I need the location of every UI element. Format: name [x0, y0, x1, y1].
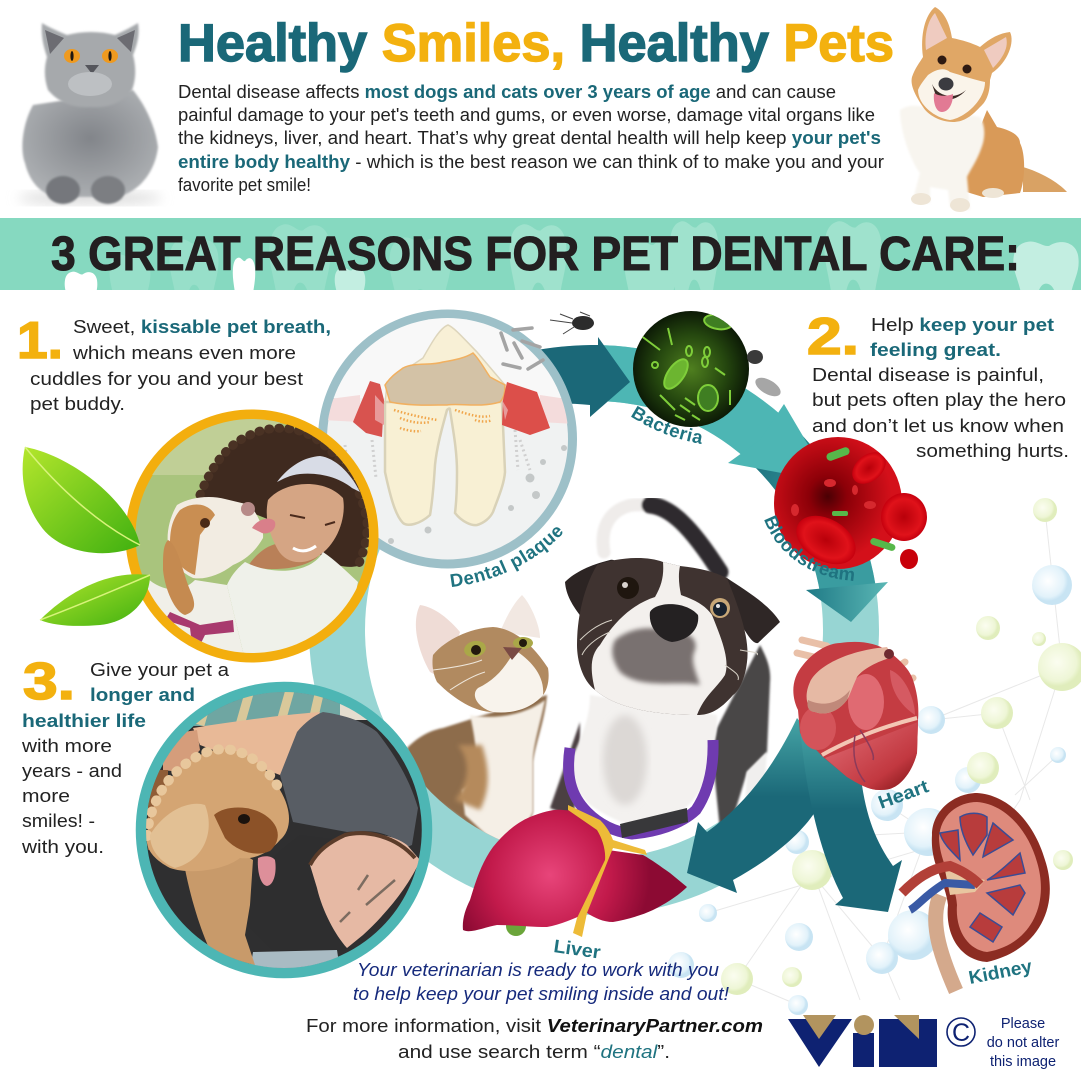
green bacilli [825, 446, 851, 462]
reason 3: smiles! - [22, 810, 95, 831]
arrow: teal head toward bloodstream [728, 404, 830, 482]
arrow: heart to liver [687, 718, 815, 893]
reason 2: 2. [807, 308, 859, 366]
icon: bloodstream [774, 437, 927, 574]
icon: gray cat photo [18, 23, 162, 205]
renal artery [902, 866, 980, 893]
do not alter notice [987, 1016, 1059, 1070]
reason 2: Dental disease is painful, [812, 364, 1044, 385]
man's dark hood [247, 835, 347, 955]
cream band [822, 718, 917, 755]
puppy nose [650, 604, 698, 642]
girl's dress [227, 552, 358, 660]
reason 2 [807, 308, 1069, 461]
banner heading text: 3 GREAT REASONS FOR PET DENTAL CARE: [51, 228, 1020, 281]
girl's headband [277, 456, 360, 492]
heart vessels [797, 640, 913, 685]
panel: girl and dog photo [130, 414, 374, 660]
puppy eyes [617, 577, 639, 599]
reason 3: with you. [21, 836, 104, 857]
copyright mark [947, 1018, 975, 1047]
aorta [807, 647, 893, 714]
copyright mark: C [952, 1019, 970, 1047]
do not alter notice: this image [990, 1054, 1056, 1070]
bone texture dots [388, 445, 567, 544]
intro text block: the kidneys, liver, and heart. That’s why great dental health will help keep your pet's [178, 127, 881, 148]
reason 1: 1. [17, 312, 63, 370]
intro text block: painful damage to your pet's teeth and gums, or even worse, damage vital organs like [178, 104, 875, 125]
reason 1: cuddles for you and your best [30, 368, 303, 389]
dog collar [167, 612, 234, 642]
intro text block: entire body healthy - which is the best reason we can think of to make you and your [178, 151, 884, 172]
man's face [310, 833, 420, 948]
icon: mite [550, 312, 594, 334]
reason 3: with more [21, 735, 112, 756]
dog nose and tongue [241, 502, 255, 516]
reason 3: healthier life [22, 710, 146, 731]
kitten body [407, 695, 547, 845]
reason 3: Give your pet a [90, 659, 230, 680]
puppy white chest [570, 695, 717, 827]
puppy collar [569, 740, 713, 834]
free red blood cells [881, 493, 927, 541]
banner: section heading [0, 218, 1081, 290]
icon: kidney [902, 793, 1050, 991]
renal pelvis [945, 870, 985, 895]
photo: kitten [407, 595, 549, 845]
icon: second mite [747, 350, 784, 400]
arrow: ring arrow toward heart [806, 582, 888, 622]
photo: blanket plaid [190, 690, 340, 726]
label: Dental plaque: Dental plaque [450, 527, 562, 587]
kitten nose [503, 647, 522, 660]
bacteria rods outside the tooth [501, 328, 543, 369]
puppy whiskers [580, 620, 758, 680]
reason 2: something hurts. [916, 440, 1069, 461]
puppy left ear [565, 560, 614, 615]
molecule bubble network background [668, 498, 1081, 1015]
puppy head [577, 558, 748, 715]
more information text [306, 1015, 763, 1062]
reason 1: Sweet, kissable pet breath, [73, 316, 331, 337]
puppy right ear [727, 578, 780, 643]
poodle tongue [258, 856, 276, 886]
reason 2: feeling great. [870, 339, 1001, 360]
intro text block [178, 81, 884, 195]
jeans [250, 950, 340, 970]
label: Bloodstream: Bloodstream [764, 515, 854, 581]
kitten eyes [464, 641, 486, 657]
label: Kidney: Kidney [967, 955, 1034, 988]
veterinarian message: to help keep your pet smiling inside and out! [353, 984, 729, 1004]
VIN logo [788, 1015, 937, 1067]
reason 3: 3. [23, 653, 75, 711]
label: Heart: Heart [875, 775, 931, 813]
heart body [793, 642, 918, 790]
panel: man and poodle photo [141, 687, 427, 973]
do not alter notice: do not alter [987, 1035, 1059, 1051]
renal vein [910, 883, 975, 910]
label: Bacteria: Bacteria [631, 406, 702, 444]
tartar plaque [385, 353, 505, 405]
photo: puppy [550, 505, 780, 838]
reason 1: pet buddy. [30, 393, 125, 414]
icon: green leaves [23, 447, 150, 626]
reason 3: years - and [22, 760, 122, 781]
gum band [322, 395, 574, 424]
heart left chambers [848, 674, 884, 730]
label: Liver: Liver [552, 935, 602, 963]
girl's hair [200, 428, 367, 567]
reason 1: which means even more [72, 342, 296, 363]
panel: dental plaque tooth illustration [320, 310, 576, 564]
icon: liver [463, 805, 687, 937]
icon: heart [793, 640, 918, 790]
dog head and body [148, 580, 244, 653]
reason 3: longer and [90, 684, 195, 705]
orange plaque specks [394, 410, 492, 431]
more information text: and use search term “ dental ”. [398, 1041, 670, 1062]
heart right ventricle [825, 722, 918, 790]
icon: bacteria sphere [633, 311, 749, 427]
reason 1 [17, 312, 331, 414]
kitten head [432, 627, 549, 712]
title: Healthy Smiles, Healthy Pets [178, 14, 894, 73]
reason 2: and don’t let us know when [812, 415, 1064, 436]
banner tooth pattern [64, 221, 1079, 290]
reason 3: more [22, 785, 70, 806]
veterinarian message: Your veterinarian is ready to work with you [357, 960, 719, 980]
upper background [334, 318, 562, 398]
photo background [152, 419, 280, 475]
man's arm [193, 712, 320, 780]
puppy tail [603, 505, 720, 572]
poodle face [214, 808, 278, 854]
kitten ears [416, 605, 460, 680]
poodle head [147, 749, 289, 871]
red gum tissue [353, 381, 384, 437]
man's gray shirt [280, 712, 418, 847]
do not alter notice: Please [1001, 1016, 1045, 1032]
veterinarian message [353, 960, 729, 1004]
reason 2: but pets often play the hero [812, 389, 1066, 410]
girl's neck and face [248, 543, 322, 569]
circular flow ring [337, 373, 851, 887]
more information text: For more information, visit VeterinaryPartner.com [306, 1015, 763, 1036]
ureter [936, 895, 956, 991]
dog ear [163, 540, 194, 615]
intro text block: favorite pet smile! [178, 174, 311, 195]
reason 2: Help keep your pet [871, 314, 1054, 335]
reason 3 [21, 653, 230, 857]
tooth crown [385, 325, 505, 405]
icon: corgi photo [900, 7, 1067, 212]
arrow: plaque to bacteria [535, 337, 630, 417]
puppy white blaze and muzzle [592, 562, 727, 715]
tooth roots [385, 402, 505, 525]
intro text block: Dental disease affects most dogs and cats over 3 years of age and can cause [178, 81, 836, 102]
puppy body dark side [712, 645, 770, 830]
arrow: heart to kidney [800, 725, 902, 912]
poodle body [183, 852, 255, 965]
puppy mottled gray muzzle [612, 628, 700, 685]
